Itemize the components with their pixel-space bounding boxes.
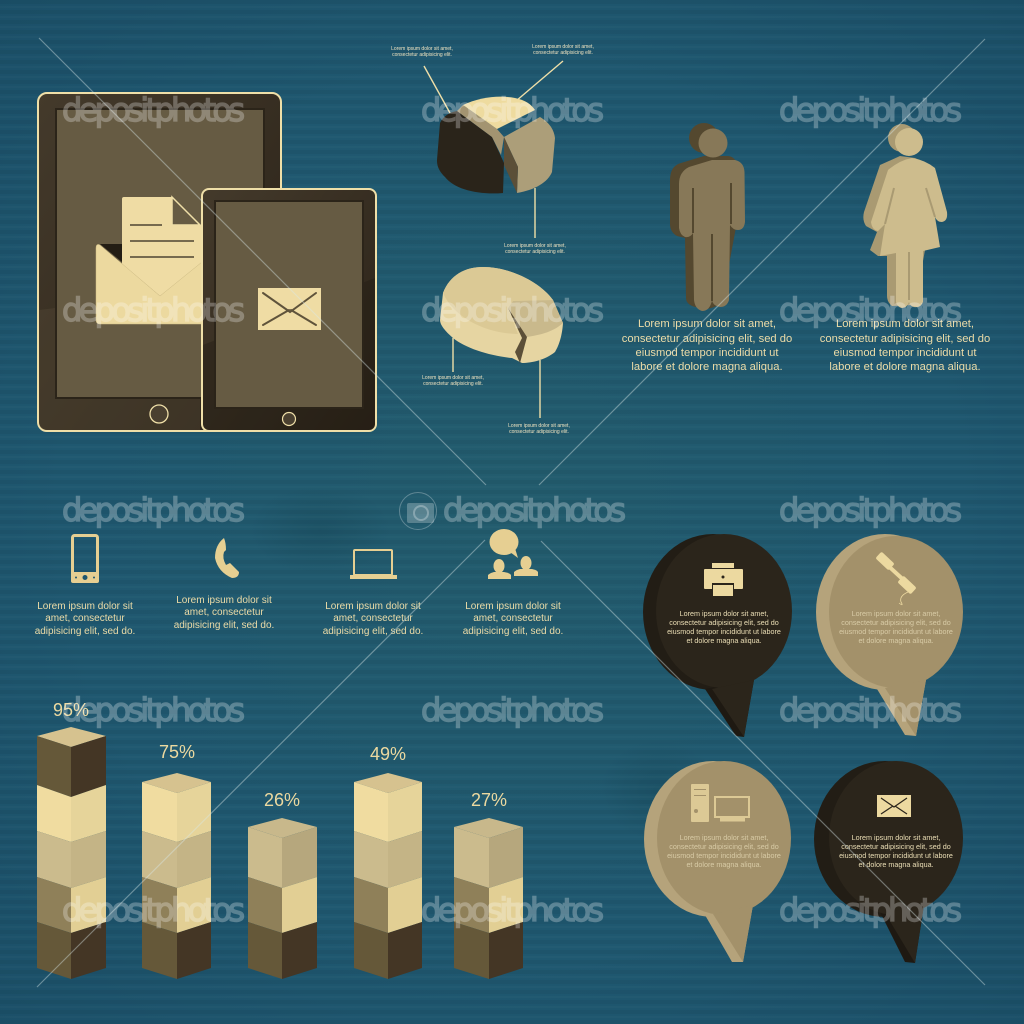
- pie top: [443, 267, 553, 334]
- icon caption 4: adipisicing elit, sed do.: [463, 626, 563, 637]
- pie chart: labels: Lorem ipsum dolor sit amet,: [391, 46, 453, 52]
- icon caption 3: Lorem ipsum dolor sit: [325, 601, 421, 612]
- bubble text: consectetur adipisicing elit, sed do: [669, 618, 779, 627]
- watermarks: depositphotos: [421, 291, 604, 329]
- female figure text: Lorem ipsum dolor sit amet,: [836, 318, 974, 330]
- watermarks: depositphotos: [779, 491, 962, 529]
- bubble text: eiusmod tempor incididunt ut labore: [667, 627, 781, 636]
- icon caption 2: amet, consectetur: [184, 607, 264, 618]
- female figure text: [820, 318, 990, 373]
- icon: watermark camera: [400, 492, 436, 530]
- single cut pie labels: consectetur adipisicing elit.: [509, 429, 569, 435]
- watermarks: depositphotos: [779, 691, 962, 729]
- watermarks: depositphotos: [779, 291, 962, 329]
- icon: smartphone: [71, 536, 99, 583]
- bar 27%: [454, 818, 523, 979]
- bar 75%: [142, 773, 211, 979]
- bubble text: et dolore magna aliqua.: [858, 636, 934, 645]
- top slice side: [457, 105, 504, 155]
- bubble text: eiusmod tempor incididunt ut labore: [839, 627, 953, 636]
- icon caption 1: Lorem ipsum dolor sit: [37, 601, 133, 612]
- leader lines: [453, 338, 540, 418]
- female figure text: consectetur adipisicing elit, sed do: [820, 333, 990, 345]
- icon: telephone handset: [875, 552, 917, 605]
- icon caption 2: adipisicing elit, sed do.: [174, 620, 274, 631]
- male figure text: [622, 318, 792, 373]
- bubble text: et dolore magna aliqua.: [858, 860, 934, 869]
- bubble text: Lorem ipsum dolor sit amet,: [680, 833, 768, 842]
- bar value labels: 49%: [370, 744, 406, 764]
- icon caption 1: amet, consectetur: [45, 613, 125, 624]
- bubble text: Lorem ipsum dolor sit amet,: [852, 609, 940, 618]
- watermarks: depositphotos: [421, 91, 604, 129]
- watermarks: depositphotos: [443, 491, 626, 529]
- watermarks: depositphotos: [62, 891, 245, 929]
- icon caption 4: Lorem ipsum dolor sit: [465, 601, 561, 612]
- bar value labels: 26%: [264, 790, 300, 810]
- watermarks: depositphotos: [62, 291, 245, 329]
- pie chart: labels: consectetur adipisicing elit.: [392, 52, 452, 58]
- single cut pie labels: Lorem ipsum dolor sit amet,: [422, 375, 484, 381]
- icon caption 3: amet, consectetur: [333, 613, 413, 624]
- slice cut face: [504, 137, 518, 193]
- icon caption 3: [323, 601, 423, 637]
- male figure text: consectetur adipisicing elit, sed do: [622, 333, 792, 345]
- icon caption 2: [174, 595, 274, 631]
- watermarks: depositphotos: [62, 91, 245, 129]
- bubble text: et dolore magna aliqua.: [686, 636, 762, 645]
- watermarks: depositphotos: [62, 491, 245, 529]
- icon caption 1: adipisicing elit, sed do.: [35, 626, 135, 637]
- bubble text: consectetur adipisicing elit, sed do: [841, 618, 951, 627]
- icon: female figure: [863, 124, 947, 308]
- shaded sector: [508, 300, 563, 337]
- leader lines: [424, 61, 563, 238]
- cut face: [508, 308, 527, 363]
- icon caption 4: [463, 601, 563, 637]
- top slice: [463, 97, 535, 129]
- bubble text: [839, 833, 953, 869]
- icon: closed envelope: [258, 288, 321, 330]
- bar 95%: [37, 727, 106, 979]
- single cut pie labels: [422, 375, 570, 435]
- icon: handset: [215, 538, 239, 578]
- male figure text: eiusmod tempor incididunt ut: [635, 347, 779, 359]
- bar value labels: 27%: [471, 790, 507, 810]
- icon: laptop: [350, 550, 397, 579]
- pie chart: single cut: [440, 267, 563, 418]
- icon caption 4: amet, consectetur: [473, 613, 553, 624]
- speech bubble: computer: [644, 761, 791, 962]
- female figure text: labore et dolore magna aliqua.: [829, 361, 981, 373]
- watermarks: depositphotos: [779, 91, 962, 129]
- bubble text: eiusmod tempor incididunt ut labore: [839, 851, 953, 860]
- female figure text: eiusmod tempor incididunt ut: [833, 347, 977, 359]
- icon: desktop computer: [691, 784, 749, 822]
- icon: male figure: [670, 123, 745, 311]
- icon: printer: [704, 563, 743, 596]
- icon: discussion people: [488, 529, 538, 579]
- dark slice: [437, 111, 504, 193]
- bar 49%: [354, 773, 422, 979]
- large tablet: [38, 93, 281, 431]
- male figure text: labore et dolore magna aliqua.: [631, 361, 783, 373]
- tablets illustration: [38, 93, 376, 431]
- right slice: [504, 117, 555, 193]
- bubble text: consectetur adipisicing elit, sed do: [841, 842, 951, 851]
- bubble text: Lorem ipsum dolor sit amet,: [852, 833, 940, 842]
- icon: envelope: [877, 795, 911, 817]
- bar value labels: 75%: [159, 742, 195, 762]
- pie chart: labels: [391, 44, 594, 255]
- bubble text: [667, 609, 781, 645]
- watermarks: depositphotos: [779, 891, 962, 929]
- bubble text: et dolore magna aliqua.: [686, 860, 762, 869]
- pie body: [440, 267, 563, 363]
- icon caption 3: adipisicing elit, sed do.: [323, 626, 423, 637]
- pie chart: separated slices: [424, 61, 563, 238]
- bubble text: [839, 609, 953, 645]
- small tablet: [202, 189, 376, 431]
- bubble text: [667, 833, 781, 869]
- pie chart: labels: consectetur adipisicing elit.: [533, 50, 593, 56]
- bubble text: Lorem ipsum dolor sit amet,: [680, 609, 768, 618]
- watermarks: depositphotos: [421, 691, 604, 729]
- speech bubble: printer: [643, 534, 792, 737]
- pie chart: labels: consectetur adipisicing elit.: [505, 249, 565, 255]
- icon caption 1: [35, 601, 135, 637]
- icon caption 2: Lorem ipsum dolor sit: [176, 595, 272, 606]
- speech bubble: mail: [814, 761, 963, 963]
- watermarks: [62, 91, 962, 929]
- icon: open envelope with document: [96, 197, 202, 324]
- bar value labels: [53, 700, 507, 810]
- bubble text: consectetur adipisicing elit, sed do: [669, 842, 779, 851]
- bar 26%: [248, 818, 317, 979]
- male figure text: Lorem ipsum dolor sit amet,: [638, 318, 776, 330]
- bubble text: eiusmod tempor incididunt ut labore: [667, 851, 781, 860]
- pie chart: labels: Lorem ipsum dolor sit amet,: [532, 44, 594, 50]
- pie chart: labels: Lorem ipsum dolor sit amet,: [504, 243, 566, 249]
- single cut pie labels: Lorem ipsum dolor sit amet,: [508, 423, 570, 429]
- speech bubble: telephone: [816, 534, 963, 736]
- bar value labels: 95%: [53, 700, 89, 720]
- watermarks: depositphotos: [421, 891, 604, 929]
- bar chart: [37, 700, 523, 979]
- single cut pie labels: consectetur adipisicing elit.: [423, 381, 483, 387]
- watermarks: depositphotos: [62, 691, 245, 729]
